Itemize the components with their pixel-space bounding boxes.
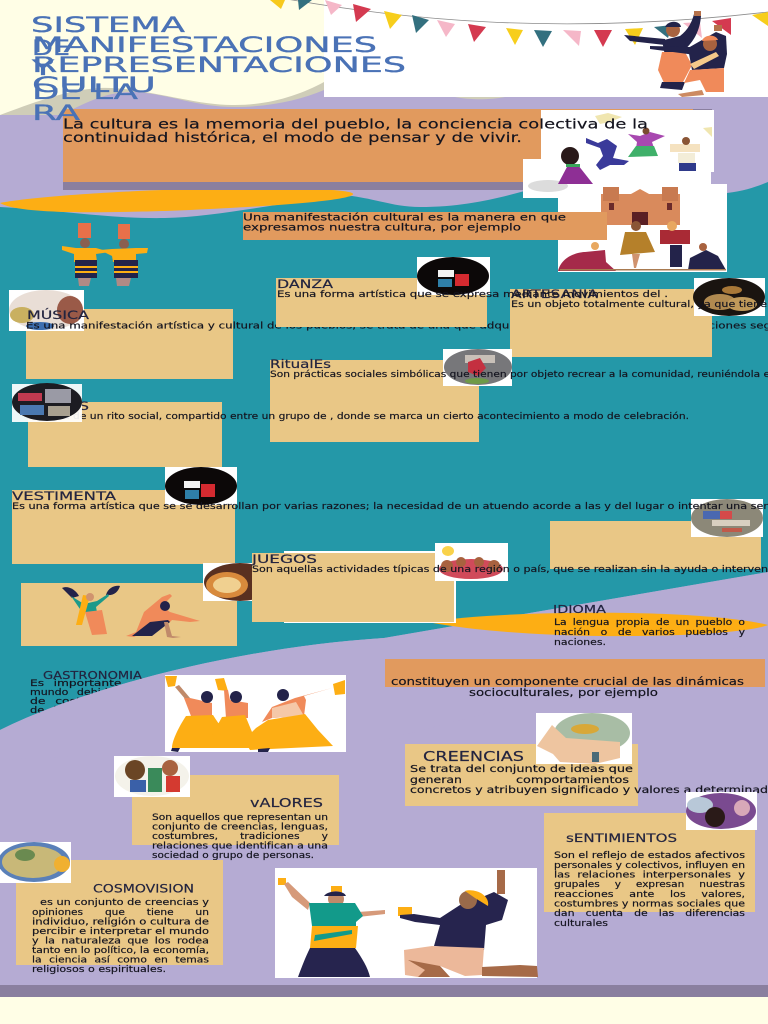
card: sentimientos: reacciones ante los valores,: [554, 890, 745, 900]
illustration: three dancers in yellow skirts: [165, 675, 346, 752]
illustration: couple dancing: [275, 868, 538, 978]
banner: manifestation definition: [243, 212, 607, 240]
text block: gastronomía: [30, 669, 201, 716]
card: sentimientos: personales y colectivos, influyen en: [554, 861, 745, 871]
title: RA: [32, 101, 81, 125]
text block: idioma: naciones.: [554, 638, 606, 648]
card: sentimientos: las relaciones interpersonales y: [554, 870, 745, 880]
yellow leaf shape: top: [0, 188, 353, 212]
text block: gastronomía: mundo debido a que forma: [30, 688, 200, 698]
title: Y: [30, 56, 54, 80]
card: artesanía: ARTESANIA: [511, 287, 598, 301]
card: danza: [276, 277, 487, 327]
card: música: Es una manifestación artística y cultural de los pueblos, se trata de una que adquiere diversas formas, estilos y funciones según: [26, 320, 768, 332]
illustration: two dancers with hats: [62, 223, 148, 286]
card: cosmovisión: individuo, religión o cultura de: [32, 916, 209, 928]
heading text: culture definition: [63, 116, 648, 146]
banner: sociocultural dynamics: [385, 659, 765, 699]
card: valores: conjunto de creencias, lenguas,: [152, 822, 328, 832]
card: fiestas: [12, 383, 689, 467]
figure: man in blue: [586, 138, 629, 170]
card: cosmovisión: opiniones que tiene un: [32, 908, 209, 918]
card: creencias: generan: [410, 775, 462, 786]
text block: gastronomía: de costumbres y hábitos: [30, 697, 201, 707]
bunting: festive flags: [270, 0, 768, 47]
band: bottom shadow: [0, 985, 768, 997]
banner: manifestation definition: expresamos nuestra cultura, por ejemplo: [243, 222, 521, 234]
figure: church: [601, 187, 680, 225]
heading text: culture definition: La cultura es la memoria del pueblo, la conciencia colectiva de la: [63, 116, 648, 132]
title: MANIFESTACIONES: [32, 33, 377, 57]
text block: gastronomía: GASTRONOMIA: [43, 669, 143, 682]
card: valores: [114, 756, 339, 861]
purple overlay: lower wave: [0, 572, 768, 760]
card: cosmovisión: y la naturaleza que los rodea: [32, 936, 209, 946]
card: sentimientos: grupales y expresan nuestras: [554, 880, 746, 890]
banner: manifestation definition: Una manifestación cultural es la manera en que: [243, 212, 566, 224]
illustration: top dancers: [624, 11, 727, 97]
card: música: MÚSICA: [27, 307, 89, 322]
title: DE LA: [32, 80, 139, 104]
figure: drummer: [670, 137, 700, 171]
card: dancers with fans: [21, 583, 237, 646]
banner: definition of culture: [63, 109, 712, 190]
card: música: [9, 290, 768, 379]
text block: gastronomía: Es importante conocer el: [30, 679, 200, 689]
card: valores: vALORES: [250, 796, 323, 810]
title: CULTU: [32, 73, 156, 97]
card: sentimientos: culturales: [554, 919, 609, 929]
card: cosmovisión: es un conjunto de creencias y: [40, 898, 209, 908]
card: juegos: [251, 543, 768, 623]
card: cosmovisión: [0, 842, 223, 975]
card: creencias: comportamientos: [516, 775, 629, 786]
title: REPRESENTACIONES: [32, 53, 406, 77]
title: [30, 13, 406, 125]
text block: idioma: [553, 603, 745, 648]
card: sentimientos: [544, 792, 757, 929]
figures: group in traditional clothing: [558, 221, 726, 271]
card: vestimenta: VESTIMENTA: [12, 489, 116, 503]
card: idioma (empty panel with photo): [550, 499, 763, 569]
text: vestimenta description: Es una forma artística que se se desarrollan por varias razones; la necesidad de un atuendo acorde a las y del lugar o intentar una ser: [12, 501, 768, 512]
title: SISTEMA: [31, 13, 186, 37]
card: cosmovisión: percibir e interpretar el mundo: [32, 927, 209, 937]
card: creencias: [405, 713, 768, 806]
card: valores: Son aquellos que representan un: [152, 813, 328, 823]
card: cosmovisión: COSMOVISION: [93, 882, 194, 896]
photo: vestimenta: [165, 467, 237, 505]
card: rituales: RitualEs: [270, 357, 331, 371]
text block: idioma: La lengua propia de un pueblo o: [554, 618, 745, 628]
card: sentimientos: dan cuenta de las diferencias: [554, 909, 746, 919]
card: fiestas: FIESTAS: [27, 399, 89, 413]
card: creencias: concretos y atribuyen significado y valores a determinad: [410, 785, 768, 796]
photo: gastronomía: [203, 563, 276, 601]
photo: danza: [417, 257, 490, 295]
card: creencias: Se trata del conjunto de ideas que: [410, 764, 633, 775]
card: sentimientos: costumbres y normas sociales que: [554, 900, 745, 910]
card: creencias: CREENCIAS: [423, 750, 524, 765]
card: vestimenta: [12, 489, 235, 564]
text block: gastronomía: de los pueblos y naciones: [30, 706, 201, 716]
figure: woman in purple: [558, 147, 593, 184]
card: artesanía: [510, 278, 767, 357]
card: cosmovisión: la ciencia así como en temas: [32, 956, 210, 966]
card: rituales: Son prácticas sociales simbólicas que tienen por objeto recrear a la comunidad, reuniéndola e: [270, 369, 768, 380]
text block: idioma: IDIOMA: [553, 603, 607, 616]
card: sentimientos: Son el reflejo de estados afectivos: [554, 851, 746, 861]
card: rituales: [270, 349, 768, 442]
text block: idioma: nación o de varios pueblos y: [554, 627, 745, 638]
card: valores: relaciones que identifican a una: [152, 842, 328, 852]
yellow leaf shape: idioma: [427, 613, 768, 636]
heading text: culture definition: continuidad histórica, el modo de pensar y de vivir.: [63, 130, 522, 146]
text: danza description: Es una forma artística que se expresa mediante movimientos del .: [277, 289, 668, 300]
card: juegos: JUEGOS: [251, 552, 317, 566]
card: fiestas: Se trata de un rito social, compartido entre un grupo de , donde se marca un cierto acontecimiento a modo de celebración.: [27, 411, 689, 422]
figure: woman in green: [628, 128, 665, 157]
card: sentimientos: sENTIMIENTOS: [566, 831, 677, 845]
photo collage: cultural illustrations: [523, 110, 727, 272]
card: valores: sociedad o grupo de personas.: [152, 851, 314, 861]
banner: sociocultural dynamics: socioculturales, por ejemplo: [469, 686, 658, 699]
card: cosmovisión: tanto en lo político, la economía,: [32, 946, 209, 956]
card: cosmovisión: religiosos o espirituales.: [32, 965, 166, 975]
card: artesanía: Es un objeto totalmente cultural, ya que tiene: [511, 299, 767, 310]
title: DE: [32, 36, 70, 60]
banner: sociocultural dynamics: constituyen un componente crucial de las dinámicas: [391, 675, 744, 688]
card: danza: DANZA: [277, 277, 333, 291]
card: valores: costumbres, tradiciones y: [152, 832, 328, 842]
card: juegos: Son aquellas actividades típicas de una región o país, que se realizan sin la ayuda o interven: [252, 564, 768, 575]
